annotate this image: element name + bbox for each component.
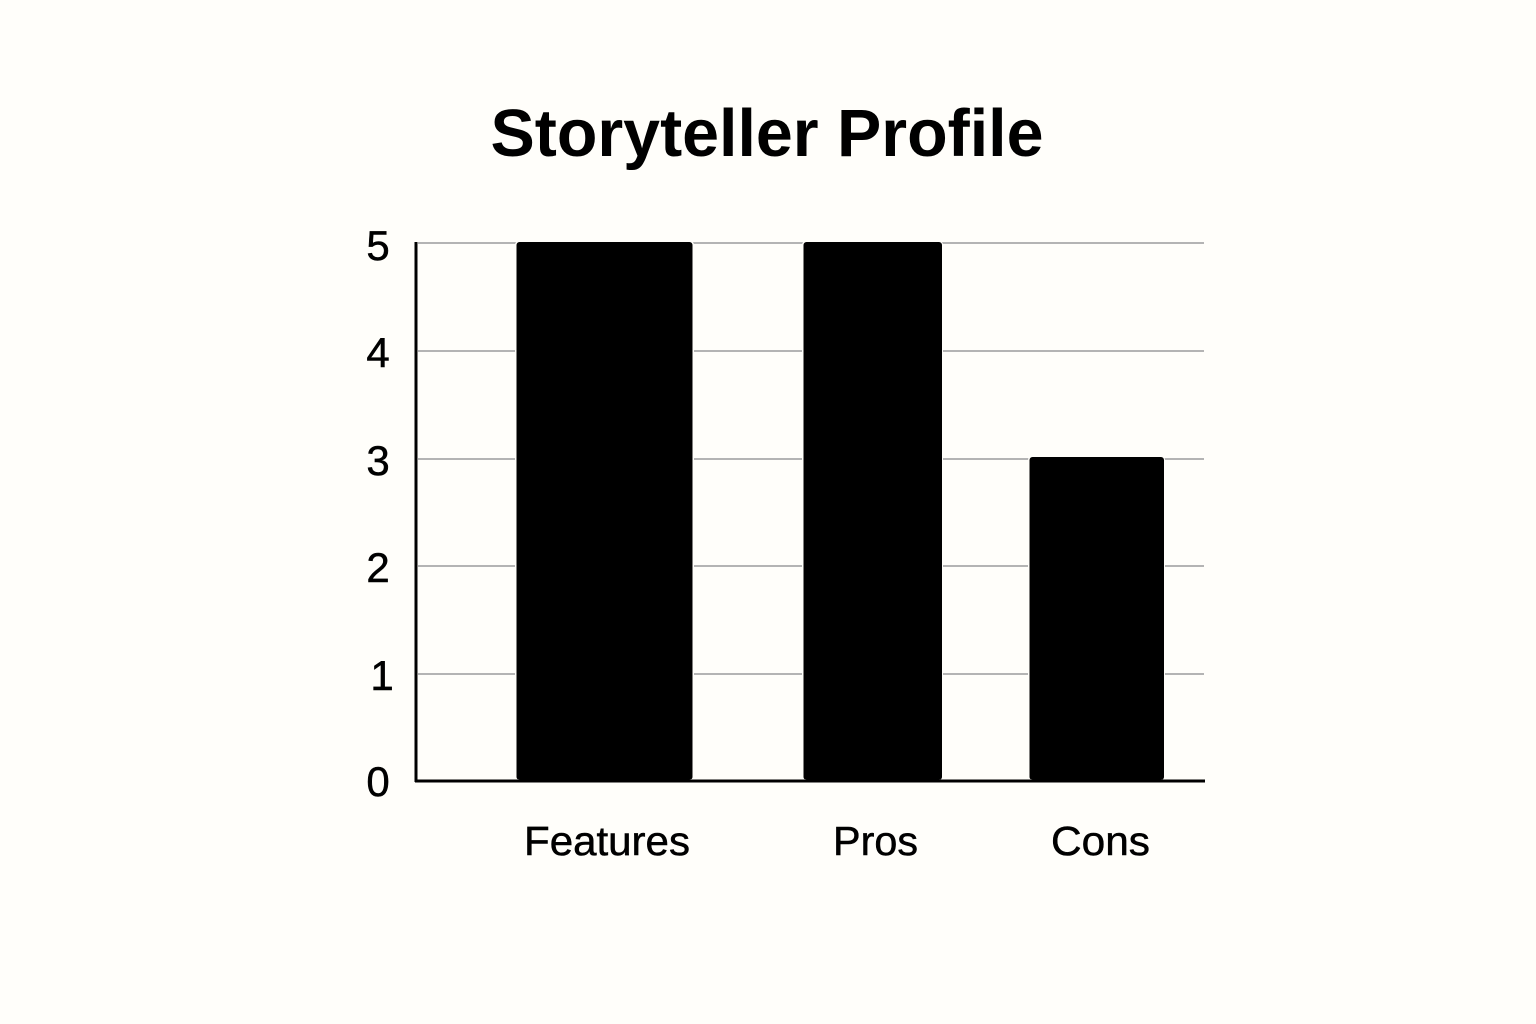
x axis xyxy=(415,780,1205,782)
x axis labels: Pros xyxy=(833,818,918,864)
bar: Features xyxy=(515,241,694,780)
x axis labels xyxy=(524,818,1150,864)
y axis labels: 1 xyxy=(370,652,394,699)
bar: Pros xyxy=(802,241,943,780)
bar: Cons xyxy=(1028,456,1165,780)
y axis labels: 2 xyxy=(366,544,390,591)
title: Storyteller Profile xyxy=(490,96,1044,171)
x axis labels: Features xyxy=(524,818,690,864)
y axis labels xyxy=(366,222,394,805)
bar chart xyxy=(366,222,1205,864)
y axis labels: 5 xyxy=(366,222,390,269)
y axis labels: 3 xyxy=(366,437,390,484)
y axis xyxy=(414,242,418,782)
y axis labels: 4 xyxy=(366,329,390,376)
y axis labels: 0 xyxy=(366,758,390,805)
x axis labels: Cons xyxy=(1051,818,1150,864)
